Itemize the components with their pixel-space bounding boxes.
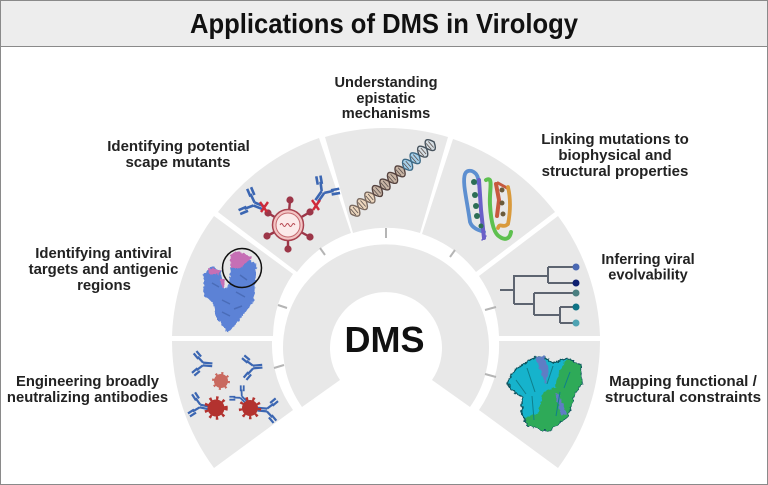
label: identifying antiviral targets: regions: [77, 278, 131, 294]
label: identifying potential scape mutants: Identifying potential: [107, 138, 250, 155]
label: inferring viral evolvability: evolvability: [608, 268, 689, 284]
label: mapping functional constraints: structural constraints: [605, 389, 761, 406]
icon: phylogenetic tree: [500, 264, 580, 326]
icon: protein ribbon: [464, 171, 511, 240]
label: understanding epistatic mechanisms: epistatic: [356, 91, 416, 107]
label: identifying antiviral targets: Identifying antiviral: [35, 246, 172, 262]
label: linking mutations: Linking mutations to: [541, 131, 689, 148]
label: linking mutations: biophysical and: [558, 147, 672, 164]
icon: antibodies and viruses: [187, 351, 278, 423]
label: engineering broadly neutralizing: Engineering broadly: [16, 374, 160, 390]
icon: protein surface structure: [507, 356, 582, 430]
title: Applications of DMS in Virology: [190, 8, 578, 39]
label: understanding epistatic mechanisms: mechanisms: [342, 106, 430, 122]
label: linking mutations: structural properties: [542, 163, 688, 180]
icon: spike protein with highlighted region: [205, 248, 262, 331]
title bar: [0, 0, 768, 46]
label: mapping functional constraints: Mapping functional /: [609, 373, 758, 390]
panel: fan wedges: [172, 128, 600, 468]
hub label: DMS: [344, 319, 424, 360]
label: engineering broadly neutralizing: neutralizing antibodies: [7, 390, 168, 406]
label: understanding epistatic mechanisms: Understanding: [335, 75, 437, 91]
icon: virus with escape antibodies: [237, 174, 342, 251]
label: identifying antiviral targets: targets and antigenic: [29, 262, 178, 278]
label: identifying potential scape mutants: scape mutants: [125, 154, 231, 171]
label: inferring viral evolvability: Inferring viral: [601, 252, 695, 268]
panel: DMS hub: [274, 228, 496, 407]
icon: DNA helix: [347, 137, 438, 219]
